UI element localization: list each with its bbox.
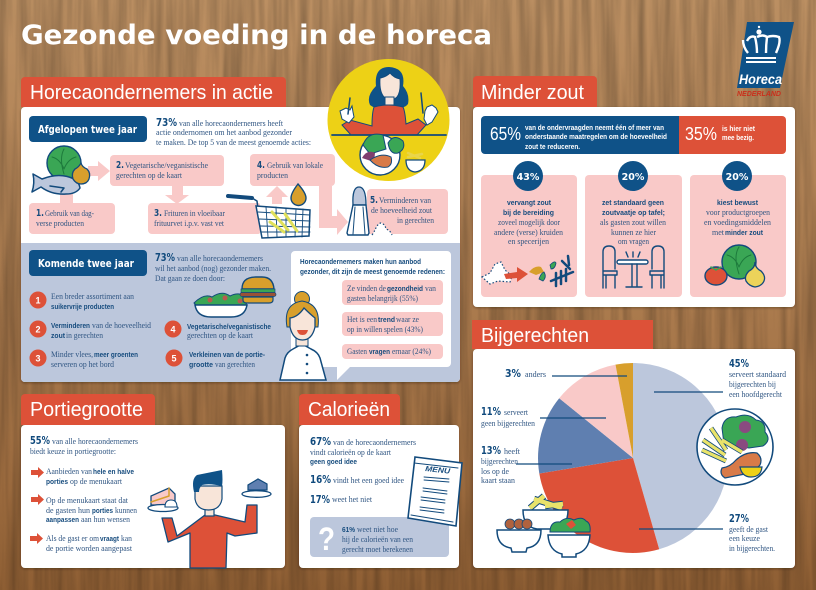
action 3: Frituren in vloeibaar [164, 209, 225, 218]
label: 3%: anders [525, 370, 546, 379]
label: 3%: 3% [505, 368, 521, 380]
reason: gezondheid: gezondheid [387, 284, 423, 293]
stat bar: 65%: zout te reduceren. [525, 142, 580, 151]
panel: Horecaondernemers in actie [21, 59, 460, 382]
leader lines [516, 376, 723, 529]
panel background [21, 107, 460, 382]
label: 27%: een keuze [729, 534, 760, 543]
icon: plate with fries and chicken [697, 409, 773, 485]
reason: trend: trend [378, 315, 395, 324]
logo: Horeca Nederland: Horeca [739, 71, 782, 87]
label: 45%: een hoofdgerecht [729, 390, 783, 399]
stat: 17%: 17% [310, 494, 330, 506]
item 2: Verminderen [51, 321, 90, 330]
label: 11%: serveert [504, 408, 529, 417]
card: 20% table: kunnen ze hier [611, 228, 656, 237]
heading tab: Portiegrootte [30, 398, 143, 421]
item 3: meer groenten [94, 350, 138, 359]
label: 45%: serveert standaard [729, 370, 786, 379]
panel background [299, 425, 459, 568]
item 2: zout [51, 331, 65, 340]
stat: 67%: 67% [310, 436, 331, 448]
stat bar: 65%: onderstaande maatregelen om de hoeveelheid [525, 132, 667, 141]
action 5: in gerechten [397, 216, 434, 225]
bullet: porties aanpassen: aanpassen [46, 515, 79, 524]
logo: Horeca Nederland: NEDERLAND [737, 89, 782, 98]
reason: vragen [342, 344, 443, 359]
icon: chef woman [280, 292, 326, 380]
bullet: hele en halve porties: Aanbieden van [46, 467, 92, 476]
label: 3% [505, 368, 546, 380]
item 5: 5 [171, 354, 177, 364]
item 4: Vegetarische/veganistische [187, 322, 271, 331]
label: 13%: kaart staan [481, 476, 515, 485]
stat: 67% [310, 436, 416, 466]
action 2: gerechten op de kaart [116, 171, 183, 180]
item 4: 4 [170, 324, 176, 334]
label: 13%: 13% [481, 445, 501, 457]
action 2: 2. [116, 160, 124, 171]
icon: fryer basket [228, 196, 310, 238]
item 1 [30, 292, 134, 311]
icon: salad bowl and burger [194, 277, 276, 317]
item 3: serveren op het bord [51, 360, 114, 369]
bullet: porties aanpassen [31, 494, 137, 524]
item 2: 2 [35, 324, 41, 334]
intro text: 55% [30, 435, 50, 447]
bullet: hele en halve porties [31, 467, 134, 486]
reason: gezondheid: gasten belangrijk (55%) [347, 294, 418, 303]
action 3 [148, 203, 236, 234]
action 3: frituurvet i.p.v. vast vet [154, 219, 225, 228]
reason: vragen: Gasten [347, 347, 367, 356]
bullet: hele en halve porties: porties [46, 477, 68, 486]
bullet: vraagt [30, 533, 133, 553]
icon: tomato, cabbage, onion [705, 245, 765, 287]
item 5: van gerechten [215, 360, 255, 369]
item 2: in gerechten [66, 331, 103, 340]
label: Komende twee jaar [29, 250, 147, 276]
action 1 [29, 203, 115, 234]
item 1: suikervrije producten [51, 302, 114, 311]
icon: menu card: MENU [425, 464, 451, 476]
label: Afgelopen twee jaar [29, 116, 147, 142]
heading tab: Horecaondernemers in actie [30, 81, 273, 104]
stat: 16%: vindt het een goed idee [333, 476, 404, 485]
item 3 [30, 350, 138, 369]
reason: trend: waar ze [396, 315, 419, 324]
item 2: van de hoeveelheid [92, 321, 151, 330]
intro text: actie ondernomen om het aanbod gezonder [156, 128, 292, 137]
panel: Bijgerechten [472, 320, 795, 568]
label: 13% [481, 445, 521, 485]
reason: trend: op in willen spelen (43%) [347, 325, 423, 334]
stat bar: 35%: 35% [685, 124, 717, 144]
card: 43%: zoveel mogelijk door [498, 218, 560, 227]
intro text: te maken. De top 5 van de meest genoemde acties: [156, 138, 311, 147]
callout: 61%: hij de calorieën van een [342, 535, 413, 544]
panel: Minder zout [473, 76, 795, 307]
icon: menu card [408, 457, 462, 526]
card: 20% products: minder zout [725, 228, 763, 237]
stat: 16% [310, 474, 404, 486]
heading tab [21, 394, 155, 425]
panel background [21, 425, 285, 568]
action 2: Vegetarische/veganistische [125, 161, 208, 170]
action 5: 5. [370, 195, 378, 206]
action 1: verse producten [36, 219, 84, 228]
stat: 67%: geen goed idee [310, 457, 357, 466]
card: 43% [481, 161, 577, 297]
stat bar: 65%: van de ondervraagden neemt één of meer van [525, 123, 664, 132]
action 4: producten [257, 171, 288, 180]
reason: gezondheid: van [425, 284, 436, 293]
icon: three side dish bowls [497, 496, 590, 557]
intro text [156, 117, 311, 147]
card: 43%: andere (verse) kruiden [494, 228, 563, 237]
heading tab: Calorieën [308, 398, 390, 421]
stat: 17% [310, 494, 373, 506]
item 3: 3 [35, 354, 41, 364]
item 5 [166, 350, 265, 369]
item 3: Minder vlees, [51, 350, 93, 359]
label: 45%: bijgerechten bij [729, 380, 776, 389]
callout: 61%: weet niet hoe [357, 525, 398, 534]
forecast intro: 73% [155, 252, 175, 264]
speech bubble: reasons: Horecaondernemers maken hun aanbod [300, 257, 421, 266]
bullet: vraagt: vraagt [100, 534, 119, 543]
label: 13%: los op de [481, 467, 509, 476]
logo: Horeca Nederland [737, 22, 794, 98]
intro text: 73% [156, 117, 177, 129]
forecast intro: van alle horecaondernemers [177, 254, 263, 263]
icon: salt to herbs [482, 256, 573, 286]
stat: 67%: van de horecaondernemers [333, 438, 416, 447]
item 1: Een breder assortiment aan [51, 292, 134, 301]
title: Gezonde voeding in de horeca [21, 20, 492, 51]
action 4 [250, 154, 335, 186]
stat: 17%: weet het niet [332, 495, 373, 504]
card: 20% table: als gasten zout willen [600, 218, 666, 227]
item 4 [164, 320, 271, 340]
bullet: vraagt: Als de gast er om [46, 534, 100, 543]
card: 20% table: zet standaard geen [602, 198, 664, 207]
icon: table and chairs [603, 246, 664, 288]
label: 13%: bijgerechten [481, 457, 518, 466]
card: 20% products: en voedingsmiddelen [704, 218, 771, 227]
card: 43%: bij de bereiding [503, 208, 554, 217]
card: 20% products: kiest bewust [717, 198, 758, 207]
heading tab: Bijgerechten [481, 324, 589, 347]
stat bar: 35%: is hier niet [722, 124, 755, 133]
card: 20% table: 20% [622, 172, 645, 183]
item 4: gerechten op de kaart [187, 331, 254, 340]
forecast intro: Dat gaan ze doen door: [155, 274, 225, 283]
item 5: grootte [189, 360, 213, 369]
card: 20% table: zoutvaatje op tafel; [602, 208, 665, 217]
card: 20% products: met [712, 228, 725, 237]
panel background [473, 349, 795, 568]
icon: fish, cabbage and onion [32, 146, 90, 194]
stat bar: 65% [481, 116, 679, 154]
card: 43%: vervangt zout [507, 198, 551, 207]
reason: gezondheid: Ze vinden de [347, 284, 386, 293]
action 1: 1. [36, 208, 44, 219]
callout: 61%: ? [318, 521, 335, 557]
heading tab [472, 320, 653, 349]
bullet: porties aanpassen: Op de menukaart staat dat [46, 496, 129, 505]
action 4: Gebruik van lokale [267, 161, 323, 170]
connector arrows [60, 161, 348, 235]
speech bubble: reasons [291, 251, 451, 380]
card: 20% products [690, 161, 786, 297]
heading tab: Minder zout [481, 81, 584, 104]
heading tab [299, 394, 400, 425]
action 5: de hoeveelheid zout [371, 206, 433, 215]
stat bar: 65%: 65% [490, 124, 521, 144]
action 1: Gebruik van dag- [45, 209, 94, 218]
bullet: vraagt: kan [121, 534, 132, 543]
icon: oil drop [291, 184, 306, 206]
label: 45% [729, 358, 786, 399]
bullet: porties aanpassen: kunnen [115, 506, 137, 515]
icon: salt shaker [347, 187, 392, 235]
callout: 61% [310, 517, 449, 557]
action 5 [367, 189, 448, 234]
label: 11% [481, 406, 535, 428]
action 5: Verminderen van [379, 196, 431, 205]
icon: man holding cake plates [148, 470, 271, 568]
panel: Portiegrootte [21, 394, 285, 568]
label: 45%: 45% [729, 358, 749, 370]
stat bar: 35% [679, 116, 786, 154]
forecast intro [155, 252, 271, 283]
bullet: porties aanpassen: aan hun wensen [81, 515, 130, 524]
stat: 16%: 16% [310, 474, 331, 486]
label: 11%: 11% [481, 406, 501, 418]
bullet: porties aanpassen: de gasten hun [46, 506, 90, 515]
bullet: hele en halve porties: hele en halve [93, 467, 134, 476]
action 3: 3. [154, 208, 162, 219]
bullet: hele en halve porties: op de menukaart [70, 477, 123, 486]
callout: 61%: gerecht moet berekenen [342, 545, 413, 554]
forecast intro: wil het aanbod (nog) gezonder maken. [155, 264, 271, 273]
card: 43%: en specerijen [508, 237, 549, 246]
reason: vragen: ernaar (24%) [392, 347, 431, 356]
item 1: 1 [35, 296, 41, 306]
action 4: 4. [257, 160, 265, 171]
action 2 [110, 155, 224, 186]
intro text: biedt keuze in portiegrootte: [30, 447, 116, 456]
reason: trend: Het is een [347, 315, 377, 324]
reason: gezondheid [342, 280, 443, 305]
label: 13%: heeft [504, 447, 521, 456]
card: 20% products: 20% [726, 172, 749, 183]
card: 20% table: om vragen [618, 237, 649, 246]
reason: trend [342, 312, 443, 336]
bullet: vraagt: de portie worden aangepast [46, 544, 133, 553]
card: 20% table [585, 161, 682, 297]
intro text [30, 435, 138, 456]
intro text: van alle horecaondernemers heeft [179, 119, 284, 128]
item 5: Verkleinen van de portie- [189, 350, 265, 359]
icon: woman eating [328, 59, 450, 181]
speech bubble: reasons: gezonder, dit zijn de meest genoemde redenen: [300, 267, 445, 276]
label: Komende twee jaar: Komende twee jaar [38, 258, 135, 270]
label: 27%: in bijgerechten. [729, 544, 775, 553]
heading tab [473, 76, 597, 107]
label: Afgelopen twee jaar: Afgelopen twee jaar [38, 124, 138, 136]
pie chart [538, 363, 728, 553]
label: 27%: 27% [729, 513, 749, 525]
reason: vragen: vragen [369, 347, 390, 356]
item 2 [30, 320, 151, 340]
card: 20% products: voor productgroepen [706, 208, 770, 217]
panel: Calorieën [299, 394, 462, 568]
stat: 67%: vindt calorieën op de kaart [310, 448, 392, 457]
callout: 61%: 61% [342, 525, 355, 534]
label: 27% [729, 513, 775, 553]
intro text: van alle horecaondernemers [52, 437, 138, 446]
label: 11%: geen bijgerechten [481, 419, 535, 428]
label: 27%: geeft de gast [729, 525, 769, 534]
card: 43%: 43% [517, 172, 540, 183]
panel background [473, 107, 795, 307]
stat bar: 35%: mee bezig. [722, 133, 754, 142]
bullet: porties aanpassen: porties [92, 506, 113, 515]
